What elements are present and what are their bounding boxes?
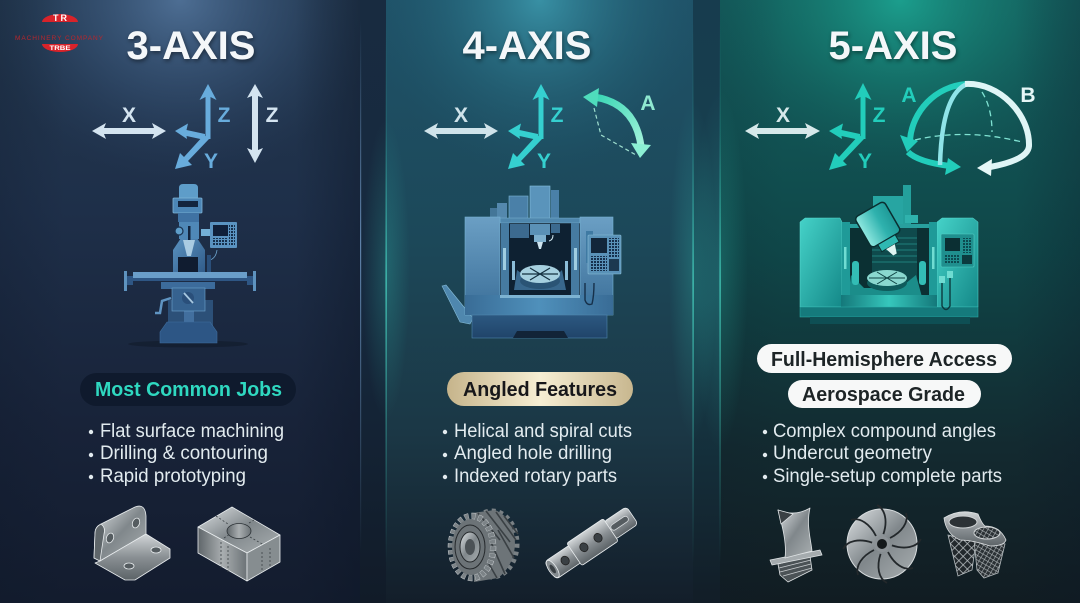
bullet list: 4-axis jobs [443, 421, 632, 487]
axes: XYZ triad [508, 84, 564, 173]
axes: XYZ triad: Y [204, 150, 218, 173]
bullet list: 3-axis jobs: Flat surface machining [100, 421, 284, 442]
part: turbine blade [770, 508, 822, 582]
job tag: Most Common Jobs: Most Common Jobs [95, 379, 282, 401]
job tag: Full-Hemisphere Access: Full-Hemisphere Access [771, 349, 997, 371]
part: L-bracket [94, 506, 170, 580]
panel: 5-axis [693, 0, 1080, 603]
machine: 4-axis machining center [442, 186, 621, 338]
arrow: A rotary arc [583, 88, 656, 158]
title: 4-axis: 4-AXIS [463, 24, 591, 68]
hemisphere arcs: A and B [900, 84, 1036, 176]
part: keyed shaft [542, 504, 640, 582]
bullet list: 4-axis jobs: Helical and spiral cuts [454, 421, 632, 442]
bullet list: 5-axis jobs: Undercut geometry [773, 443, 932, 464]
arrow: X: X [454, 104, 468, 127]
machine: 5-axis machining center [800, 185, 978, 324]
arrow: X [92, 104, 166, 139]
arrow: X: X [122, 104, 136, 127]
panel background: 5-axis [693, 0, 1080, 603]
arrow: A rotary arc: A [640, 92, 656, 115]
bullet list: 5-axis jobs: Single-setup complete parts [773, 466, 1002, 487]
axes: XYZ triad: Y [858, 150, 872, 173]
logo [15, 13, 104, 52]
job tag: Full-Hemisphere Access [757, 344, 1012, 373]
hemisphere arcs: A and B: B [1020, 84, 1036, 107]
logo: TRBE [50, 46, 70, 52]
machine: vertical knee mill [124, 184, 256, 348]
part: drilled block [198, 507, 280, 581]
axes: XYZ triad [175, 84, 231, 173]
part: lattice cup implant [944, 512, 1006, 578]
job tag: Angled Features [447, 372, 633, 406]
bullet list: 5-axis jobs: Complex compound angles [773, 421, 996, 442]
divider lines [360, 20, 748, 580]
axis diagram: 3-axis [92, 84, 279, 173]
arrow: X [424, 104, 498, 139]
bullet list: 5-axis jobs [763, 421, 1002, 487]
job tag: Most Common Jobs [80, 373, 296, 406]
axes: XYZ triad [829, 83, 886, 173]
job tag: Aerospace Grade [788, 380, 981, 408]
arrow: X [745, 104, 820, 139]
hemisphere arcs: A and B: A [901, 84, 917, 107]
axes: XYZ triad: Z [873, 104, 886, 127]
logo: MACHINERY COMPANY [15, 35, 104, 42]
bullet list: 4-axis jobs: Angled hole drilling [454, 443, 612, 464]
arrow: Z: Z [266, 104, 279, 127]
part: impeller [843, 505, 921, 583]
panel: 3-axis [0, 0, 360, 603]
panel background: 4-axis [360, 0, 693, 603]
bullet list: 3-axis jobs [89, 421, 284, 487]
axis diagram: 5-axis [745, 83, 1036, 176]
job tag: Angled Features: Angled Features [463, 379, 617, 401]
arrow: Z [247, 84, 279, 163]
job tag: Aerospace Grade: Aerospace Grade [802, 384, 965, 406]
title: 5-axis: 5-AXIS [829, 24, 957, 68]
bullet list: 4-axis jobs: Indexed rotary parts [454, 466, 617, 487]
axis diagram: 4-axis [424, 84, 656, 173]
bullet list: 3-axis jobs: Drilling & contouring [100, 443, 268, 464]
title: 3-axis: 3-AXIS [127, 24, 255, 68]
part: helical gear [451, 510, 518, 582]
panel: 4-axis [360, 0, 693, 603]
arrow: X: X [776, 104, 790, 127]
panel background: 3-axis [0, 0, 360, 603]
axes: XYZ triad: Z [551, 104, 564, 127]
axes: XYZ triad: Z [218, 104, 231, 127]
logo: TR [53, 13, 68, 23]
bullet list: 3-axis jobs: Rapid prototyping [100, 466, 246, 487]
axes: XYZ triad: Y [537, 150, 551, 173]
